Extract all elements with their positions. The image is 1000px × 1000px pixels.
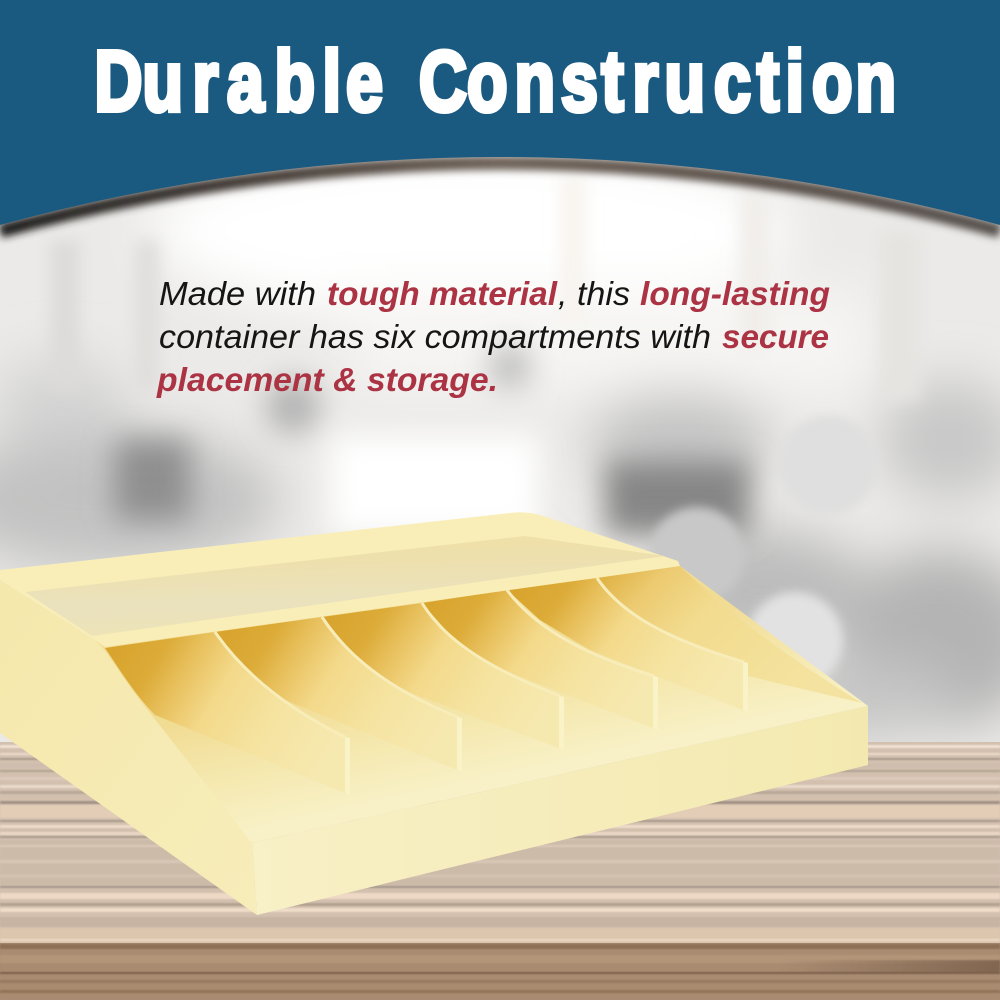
front lip: [252, 706, 868, 915]
divider 3: [322, 603, 564, 750]
description text: [156, 275, 830, 398]
divider 4: [422, 590, 658, 730]
divider 2: [215, 617, 462, 772]
description text: placement & storage.: [156, 361, 498, 398]
description text: Made with: [159, 275, 316, 312]
divider 5: [507, 578, 748, 712]
header banner with shadow: [0, 0, 1000, 231]
description text: secure: [722, 318, 829, 355]
left side face: [0, 580, 257, 915]
title: Durable Construction: [95, 35, 896, 129]
description text: long-lasting: [640, 275, 830, 312]
product: six-compartment organizer: [0, 512, 868, 915]
description text: container has six compartments with: [159, 318, 711, 355]
right side wall: [597, 566, 862, 703]
blurred room background: [0, 140, 1000, 750]
divider 1: [105, 632, 350, 795]
description text: , this: [558, 275, 630, 312]
description text: tough material: [327, 275, 558, 312]
wooden table surface: [0, 742, 1000, 1000]
top tray shelf: [0, 512, 680, 647]
product floor: [95, 566, 868, 843]
